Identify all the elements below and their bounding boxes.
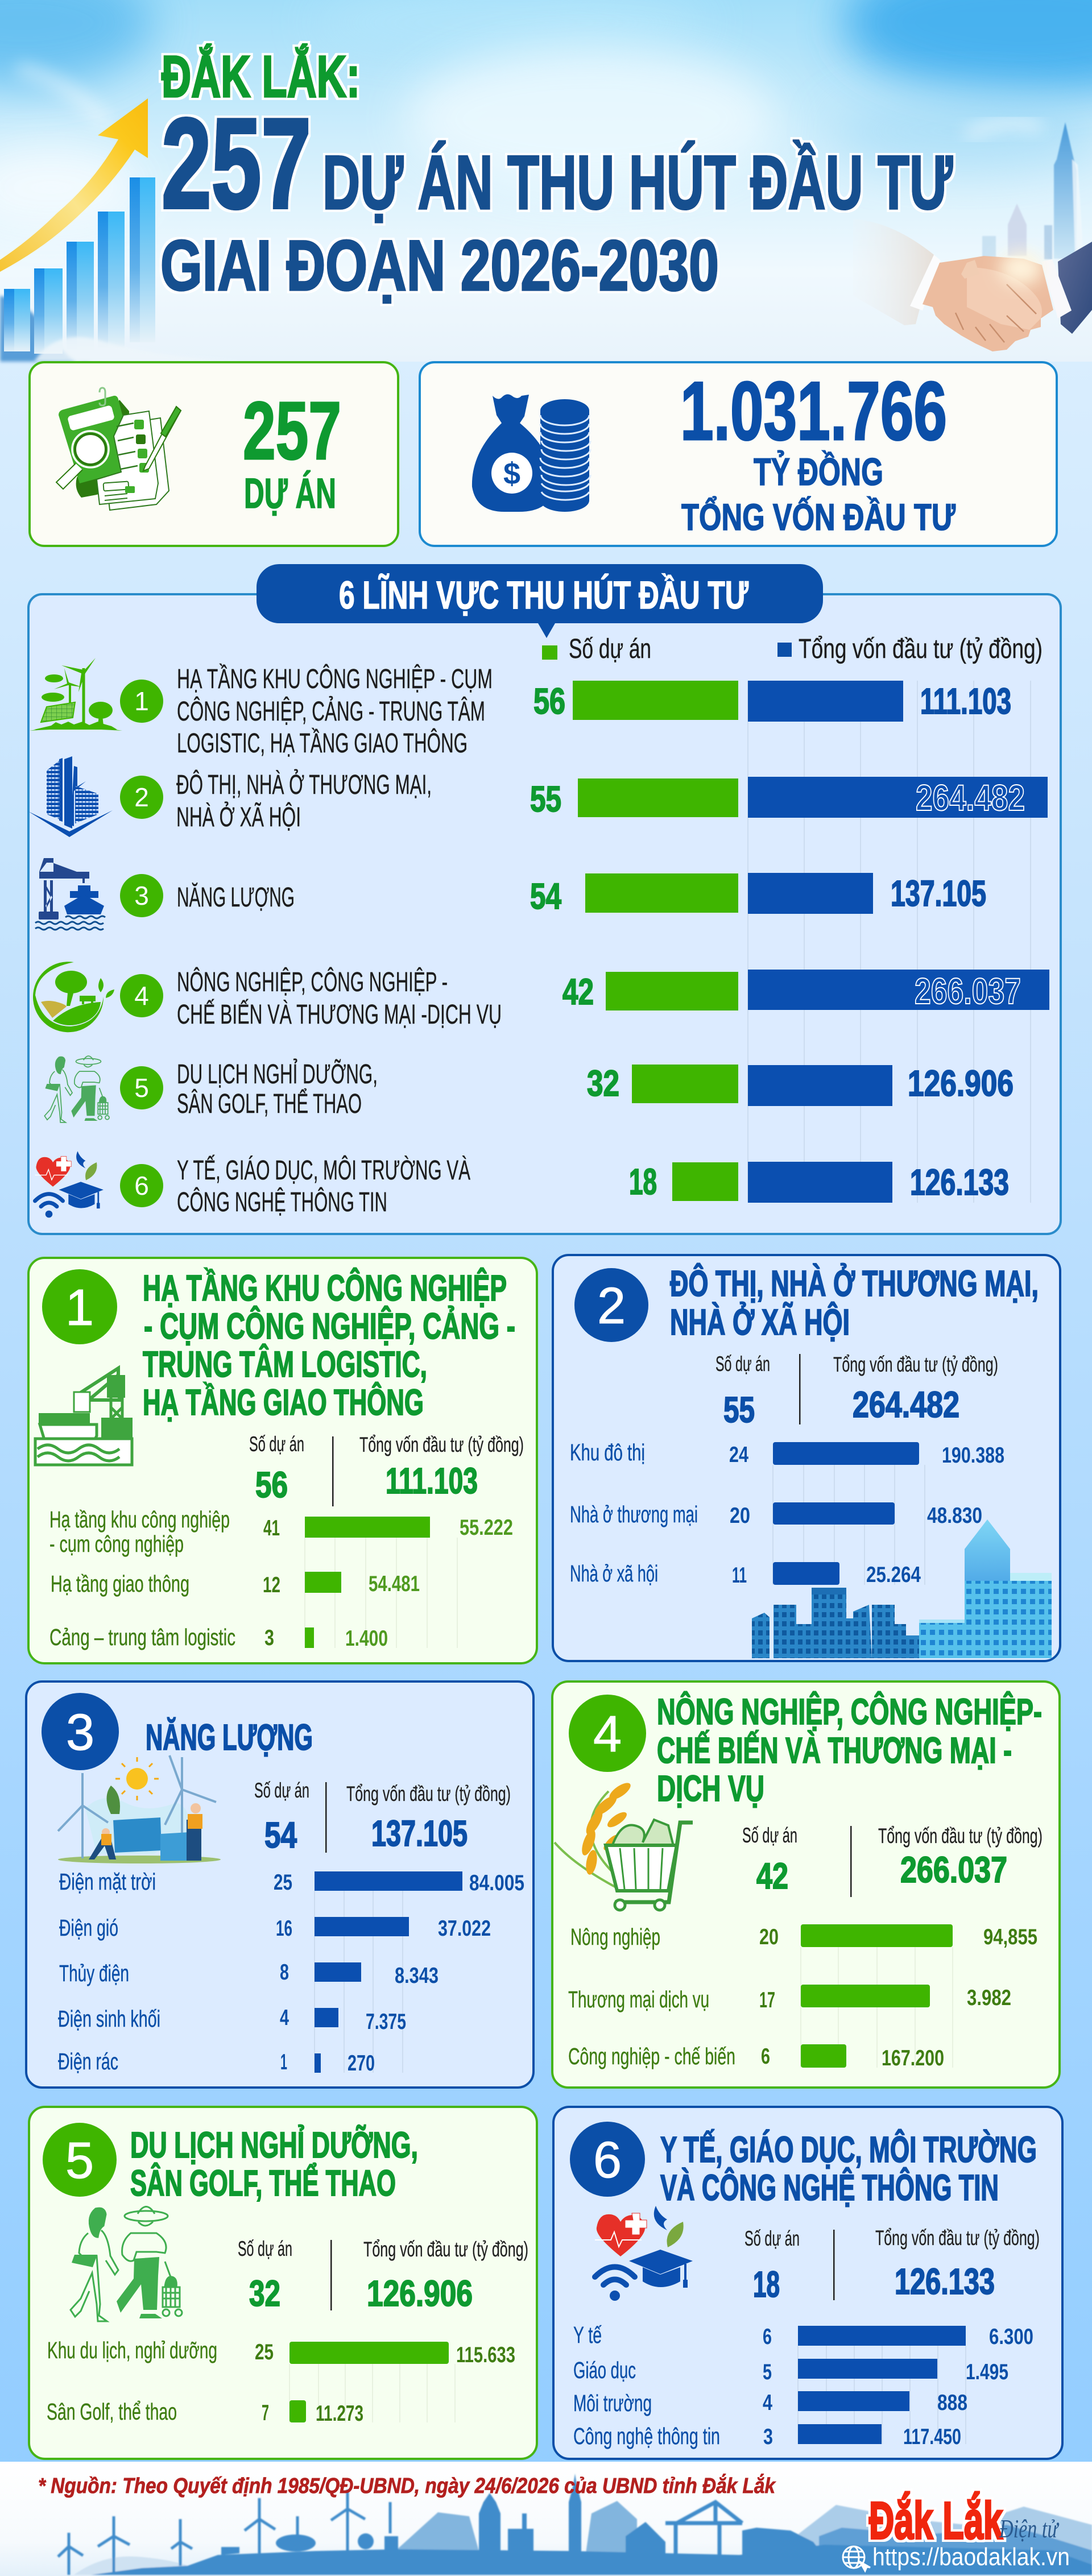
label 3: NĂNG LƯỢNG: [177, 883, 295, 913]
badge 6: [120, 1164, 163, 1207]
sub-sector rows 3: Điện mặt trời: [59, 1869, 156, 1895]
sub-sector rows 1: 1.400: [345, 1626, 388, 1651]
source note: * Nguồn: Theo Quyết định 1985/QĐ-UBND, ngày 24/6/2026 của UBND tỉnh Đắk Lắk: [38, 2473, 776, 2498]
summary 6: 126.133: [895, 2261, 995, 2302]
heading 1: HẠ TẦNG KHU CÔNG NGHIỆP: [143, 1267, 507, 1308]
label: tỷ đồng: TỶ ĐỒNG: [754, 450, 883, 494]
chart bars: [4, 177, 155, 354]
distant towers right: [982, 122, 1083, 264]
icon: wind turbine and solar: [30, 658, 122, 731]
bars 1: [533, 681, 1011, 722]
bars 3: [530, 873, 986, 917]
label 4: [177, 967, 502, 1030]
illustration: health, education, wifi: [595, 2206, 693, 2301]
sub-sector rows 1: 41: [263, 1516, 280, 1540]
sub-sector rows 2: Nhà ở xã hội: [570, 1560, 658, 1587]
sub-sector rows 4: 94,855: [983, 1925, 1037, 1949]
sub-sector rows 6: 888: [937, 2391, 967, 2415]
summary 4: 42: [756, 1856, 788, 1896]
sub-sector rows 3: 270: [348, 2051, 375, 2076]
heading 2: NHÀ Ở XÃ HỘI: [670, 1301, 850, 1343]
sub-sector rows 1: Hạ tầng khu công nghiệp: [49, 1506, 230, 1533]
sub-sector rows 1: Hạ tầng giao thông: [51, 1571, 189, 1597]
label 2: [176, 769, 432, 833]
sub-sector rows 6: Y tế: [573, 2322, 602, 2348]
heading 1: TRUNG TÂM LOGISTIC,: [143, 1343, 427, 1385]
sub-sector rows 5: 7: [262, 2401, 269, 2425]
sub-sector rows 3: 8: [280, 1960, 289, 1985]
badge 3: 3: [66, 1704, 94, 1761]
badge 1: [120, 680, 163, 723]
panel 4: agriculture detail: [552, 1682, 1060, 2088]
row 2: urban and housing: [28, 756, 1048, 837]
label: tổng vốn đầu tư: TỔNG VỐN ĐẦU TƯ: [681, 496, 956, 538]
skyline silhouette: [58, 2474, 1092, 2575]
sub-sector rows 3: 16: [276, 1916, 292, 1941]
heading 4: [657, 1691, 1042, 1809]
value: 257: 257: [243, 385, 341, 477]
sub-sector rows 3: Thủy điện: [59, 1960, 129, 1986]
summary 4: [742, 1824, 1043, 1897]
badge 5: 5: [65, 2132, 94, 2189]
icon: port crane and ship: [35, 1368, 133, 1465]
sub-sector rows 1: 3: [264, 1626, 274, 1650]
summary 6: Số dự án: [744, 2227, 800, 2250]
sub-sector rows 3: 25: [274, 1870, 292, 1895]
sub-sector rows 3: Điện sinh khối: [58, 2006, 160, 2032]
sub-sector rows 2: [570, 1439, 1004, 1588]
bars 3: 54: [530, 876, 561, 917]
summary 2: 55: [723, 1389, 755, 1430]
heading 1: [143, 1267, 515, 1423]
sub-sector rows 3: Điện rác: [58, 2048, 118, 2074]
sub-sector rows 5: 115.633: [456, 2343, 515, 2367]
badge 5: [43, 2123, 117, 2197]
badge 2: 2: [134, 782, 149, 812]
sub-sector rows 5: [47, 2337, 515, 2426]
label 2: NHÀ Ở XÃ HỘI: [176, 801, 301, 833]
panel 3: energy detail: [26, 1682, 533, 2088]
badge 2: [120, 776, 163, 819]
summary 3: Tổng vốn đầu tư (tỷ đồng): [346, 1782, 511, 1805]
icon: travellers: [44, 1056, 109, 1123]
summary 1: [249, 1432, 524, 1506]
heading pill: [257, 564, 823, 638]
summary 1: 111.103: [386, 1460, 478, 1501]
summary 3: 54: [264, 1815, 297, 1856]
sub-sector rows 5: Khu du lịch, nghỉ dưỡng: [47, 2337, 217, 2363]
sub-sector rows 5: Sân Golf, thể thao: [47, 2399, 177, 2425]
bars 3: 137.105: [891, 873, 986, 914]
sub-sector rows 4: Nông nghiệp: [570, 1924, 660, 1950]
mountains bottom left: [0, 296, 91, 363]
sub-sector rows 6: 6.300: [989, 2325, 1033, 2349]
legend: Số dự án: [569, 634, 651, 664]
illustration: rice and shopping cart: [555, 1780, 693, 1910]
logo: Đắk Lắk điện tử: Đắk Lắk: [869, 2491, 1003, 2550]
summary 5: [238, 2237, 528, 2314]
sub-sector rows 5: 11.273: [316, 2401, 363, 2426]
bars 6: 18: [629, 1161, 657, 1202]
panel 6: health, education, IT detail: [553, 2107, 1062, 2459]
badge 2: [574, 1268, 648, 1342]
sub-sector rows 6: 117.450: [903, 2425, 961, 2449]
heading 1: HẠ TẦNG GIAO THÔNG: [143, 1381, 424, 1423]
sub-sector rows 6: 3: [763, 2425, 773, 2449]
sub-sector rows 6: 5: [763, 2360, 772, 2384]
sub-sector rows 3: 1: [280, 2050, 287, 2074]
panel 2: urban and housing detail: [553, 1255, 1060, 1661]
website url: https://baodaklak.vn: [872, 2543, 1070, 2571]
sub-sector rows 3: 8.343: [395, 1964, 439, 1988]
summary 4: 266.037: [900, 1849, 1007, 1890]
summary 2: [715, 1352, 998, 1430]
title: ĐẮK LẮK:: [162, 44, 360, 109]
bars 6: 126.133: [910, 1162, 1009, 1203]
heading 5: SÂN GOLF, THỂ THAO: [130, 2162, 396, 2204]
summary 6: [744, 2226, 1040, 2305]
label 1: CÔNG NGHIỆP, CẢNG - TRUNG TÂM: [177, 695, 485, 727]
icon: crane and ship: [35, 858, 105, 930]
panel 1: industrial infrastructure detail: [28, 1258, 537, 1663]
summary 5: Số dự án: [238, 2237, 292, 2260]
sub-sector rows 3: 4: [280, 2006, 289, 2030]
label 1: [177, 664, 493, 759]
sub-sector rows 3: Điện gió: [59, 1915, 118, 1941]
label 6: Y TẾ, GIÁO DỤC, MÔI TRƯỜNG VÀ: [177, 1155, 470, 1186]
illustration: travellers: [71, 2206, 182, 2321]
label 5: SÂN GOLF, THỂ THAO: [177, 1088, 362, 1119]
sub-sector rows 2: Khu đô thị: [570, 1439, 645, 1465]
bars 5: 32: [587, 1063, 619, 1104]
bars 6: [629, 1161, 1009, 1203]
sub-sector rows 6: Giáo dục: [573, 2357, 636, 2383]
heading 6: [660, 2128, 1037, 2208]
label: dự án: DỰ ÁN: [244, 470, 336, 517]
bars 1: 111.103: [920, 681, 1011, 722]
bars 4: 42: [562, 971, 594, 1012]
summary 2: 264.482: [853, 1384, 959, 1425]
heading 1: - CỤM CÔNG NGHIỆP, CẢNG -: [144, 1305, 515, 1347]
bars 1: 56: [533, 681, 565, 722]
bars 4: 266.037: [915, 971, 1021, 1012]
heading 4: DỊCH VỤ: [657, 1768, 764, 1809]
badge 3: 3: [134, 881, 149, 910]
icon: buildings: [28, 756, 113, 837]
summary 5: 32: [249, 2273, 280, 2314]
badge 3: [120, 874, 163, 917]
summary 2: Số dự án: [715, 1352, 770, 1376]
row 1: industrial infrastructure: [30, 658, 1011, 759]
row 4: agriculture: [33, 962, 1049, 1032]
badge 1: 1: [134, 686, 149, 716]
summary 6: 18: [753, 2264, 780, 2305]
icon: health, education, wifi: [35, 1151, 104, 1217]
badge 3: [42, 1693, 119, 1770]
sub-sector rows 4: 17: [759, 1988, 775, 2012]
label 4: NÔNG NGHIỆP, CÔNG NGHIỆP -: [177, 967, 448, 997]
label 6: [177, 1155, 470, 1217]
sub-sector rows 1: Cảng – trung tâm logistic: [49, 1624, 235, 1650]
sub-sector rows 3: [58, 1869, 524, 2076]
panel 5: tourism detail: [29, 2107, 537, 2459]
heading 3: NĂNG LƯỢNG: [146, 1717, 313, 1758]
sub-sector rows 6: [573, 2322, 1033, 2449]
sub-sector rows 2: 190.388: [942, 1443, 1004, 1468]
badge 1: [42, 1269, 117, 1344]
bars 2: [530, 777, 1048, 819]
logo: Đắk Lắk điện tử: Điện tử: [999, 2514, 1060, 2543]
badge 5: 5: [134, 1073, 149, 1103]
badge 4: 4: [593, 1706, 622, 1763]
sub-sector rows 1: - cụm công nghiệp: [49, 1531, 184, 1557]
stat card: 257 projects: [30, 27, 398, 546]
bars 5: 126.906: [908, 1063, 1014, 1104]
stat card: total investment: [420, 362, 1057, 546]
title: 257: [162, 92, 311, 235]
legend: [542, 634, 1043, 664]
bars 5: [587, 1063, 1014, 1106]
label 1: HẠ TẦNG KHU CÔNG NGHIỆP - CỤM: [177, 664, 493, 694]
summary 2: Tổng vốn đầu tư (tỷ đồng): [833, 1353, 998, 1376]
bars 2: 55: [530, 778, 561, 819]
sub-sector rows 2: Nhà ở thương mại: [570, 1501, 698, 1527]
sub-sector rows 4: Công nghiệp - chế biến: [568, 2043, 735, 2069]
summary 1: 56: [255, 1464, 288, 1505]
label 2: ĐÔ THỊ, NHÀ Ở THƯƠNG MẠI,: [176, 769, 432, 800]
badge 5: [120, 1066, 163, 1109]
sub-sector rows 3: 84.005: [469, 1871, 524, 1895]
sub-sector rows 6: 1.495: [966, 2360, 1008, 2384]
badge 6: 6: [593, 2132, 622, 2189]
label 4: CHẾ BIẾN VÀ THƯƠNG MẠI -DỊCH VỤ: [177, 999, 502, 1030]
sub-sector rows 3: 7.375: [366, 2010, 406, 2034]
icon: money bag and coins: [472, 394, 590, 512]
sub-sector rows 1: 55.222: [460, 1515, 513, 1540]
badge 1: 1: [65, 1279, 94, 1336]
row 5: tourism: [44, 1056, 1014, 1123]
sub-sector rows 6: Công nghệ thông tin: [573, 2423, 720, 2449]
sub-sector rows 4: 20: [759, 1925, 779, 1949]
sub-sector rows 2: 48.830: [927, 1504, 982, 1528]
value: 1.031.766: 1.031.766: [680, 365, 947, 457]
bars 4: [562, 970, 1049, 1012]
badge 4: 4: [134, 981, 149, 1010]
title: [160, 44, 953, 305]
summary 5: 126.906: [367, 2273, 473, 2314]
label 5: [177, 1058, 378, 1119]
badge 6: 6: [134, 1171, 149, 1200]
illustration: solar and wind energy: [58, 1755, 221, 1863]
sub-sector rows 5: 25: [255, 2340, 274, 2364]
sub-sector rows 2: 24: [729, 1443, 748, 1467]
title: GIAI ĐOẠN 2026-2030: [160, 226, 719, 305]
handshake: [853, 219, 1092, 351]
label 1: LOGISTIC, HẠ TẦNG GIAO THÔNG: [177, 728, 468, 759]
sub-sector rows 6: 4: [763, 2391, 772, 2415]
rising arrow: [0, 98, 148, 272]
summary 5: Tổng vốn đầu tư (tỷ đồng): [363, 2238, 528, 2261]
summary 3: 137.105: [371, 1813, 468, 1854]
row 3: energy: [35, 858, 986, 930]
summary 1: Số dự án: [249, 1432, 304, 1456]
sub-sector rows 2: 25.264: [866, 1563, 921, 1587]
sub-sector rows 6: Môi trường: [573, 2390, 652, 2416]
sub-sector rows 2: 11: [732, 1563, 747, 1588]
sub-sector rows 4: [568, 1924, 1037, 2070]
header banner: sky, chart, arrow and handshake: [0, 0, 1092, 363]
heading pill: 6 LĨNH VỰC THU HÚT ĐẦU TƯ: [339, 573, 749, 617]
icon: money bag and coins: $: [503, 457, 520, 491]
heading 5: [130, 2124, 418, 2204]
heading 5: DU LỊCH NGHỈ DƯỠNG,: [130, 2124, 418, 2165]
label 6: CÔNG NGHỆ THÔNG TIN: [177, 1187, 387, 1217]
heading 2: [670, 1262, 1039, 1343]
icon: clipboard and magnifier: [56, 27, 181, 510]
sub-sector rows 4: 3.982: [967, 1986, 1011, 2010]
illustration: city buildings: [752, 1519, 1052, 1658]
summary 4: Số dự án: [742, 1824, 797, 1847]
label 5: DU LỊCH NGHỈ DƯỠNG,: [177, 1058, 378, 1090]
sub-sector rows 1: 12: [263, 1573, 280, 1597]
icon: agriculture circle: [33, 962, 114, 1032]
sub-sector rows 6: 6: [763, 2325, 772, 2349]
icon: globe: [843, 2546, 870, 2571]
sub-sector rows 1: [49, 1506, 513, 1651]
panel: 6 sectors overview: [28, 564, 1061, 1234]
summary 3: Số dự án: [254, 1779, 309, 1802]
summary 3: [254, 1779, 511, 1856]
badge 4: [569, 1695, 646, 1772]
sub-sector rows 1: 54.481: [369, 1572, 420, 1596]
sub-sector rows 4: 6: [761, 2044, 770, 2069]
row 6: health, education, environment, IT: [35, 1151, 1009, 1217]
badge 6: [570, 2122, 645, 2197]
badge 4: [120, 974, 163, 1017]
bars 2: 264.482: [916, 777, 1025, 818]
sub-sector rows 4: Thương mại dịch vụ: [568, 1986, 709, 2012]
summary 1: Tổng vốn đầu tư (tỷ đồng): [359, 1433, 524, 1456]
sub-sector rows 3: 37.022: [438, 1916, 491, 1941]
badge 2: 2: [597, 1278, 626, 1335]
sub-sector rows 4: 167.200: [882, 2046, 944, 2070]
sub-sector rows 2: 20: [730, 1504, 750, 1528]
footer band with skyline: [0, 2462, 1092, 2576]
